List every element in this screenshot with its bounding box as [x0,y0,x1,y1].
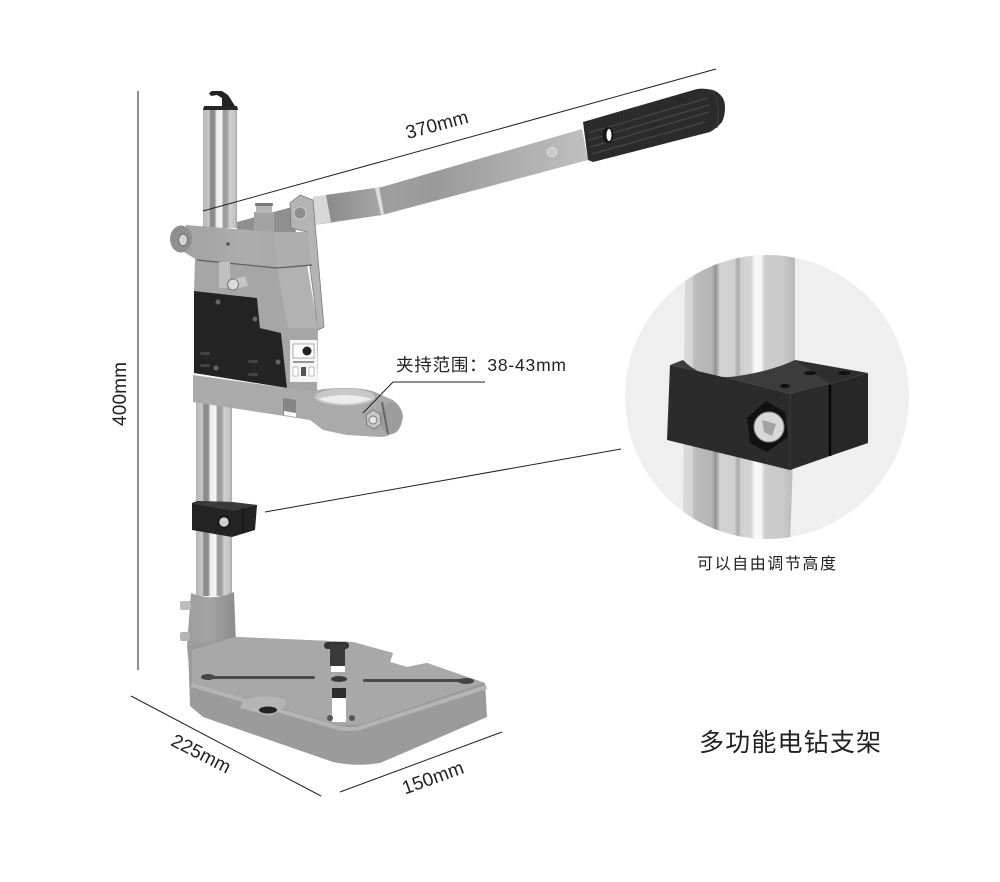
detail circle: height collar [625,250,909,545]
dimension: height: 400mm [110,362,131,426]
dimension: base width [340,732,502,799]
base plate [188,637,487,765]
drill stand product [170,89,725,765]
lower column [196,400,232,596]
dimension: base depth [131,696,321,796]
black plate [194,291,287,388]
head casting [170,225,318,394]
clamping range callout: 夹持范围：38-43mm [396,355,566,375]
enlarged collar [667,360,868,470]
product title: 多功能电钻支架 [699,729,881,757]
dimension: base depth: 225mm [167,731,234,778]
rubber grip [583,89,725,162]
leader line to detail [265,449,621,512]
dimension: lever length [203,69,716,211]
enlarged column [683,250,795,545]
link bolt [294,207,306,219]
dimension: lever length: 370mm [404,107,471,144]
steel link plate [290,195,324,330]
base column socket [180,592,236,680]
detail caption: 可以自由调节高度 [697,555,836,573]
rear bracket and depth knob [237,203,296,234]
hex socket screw [747,401,788,452]
height stop collar [192,501,257,537]
dimension: base width: 150mm [400,758,467,799]
GS label [290,340,317,382]
base slots [201,642,474,722]
clamping range callout [363,355,566,413]
clamp arm and drill collar [193,375,403,437]
upper column [203,91,238,228]
lever arm [313,129,588,225]
